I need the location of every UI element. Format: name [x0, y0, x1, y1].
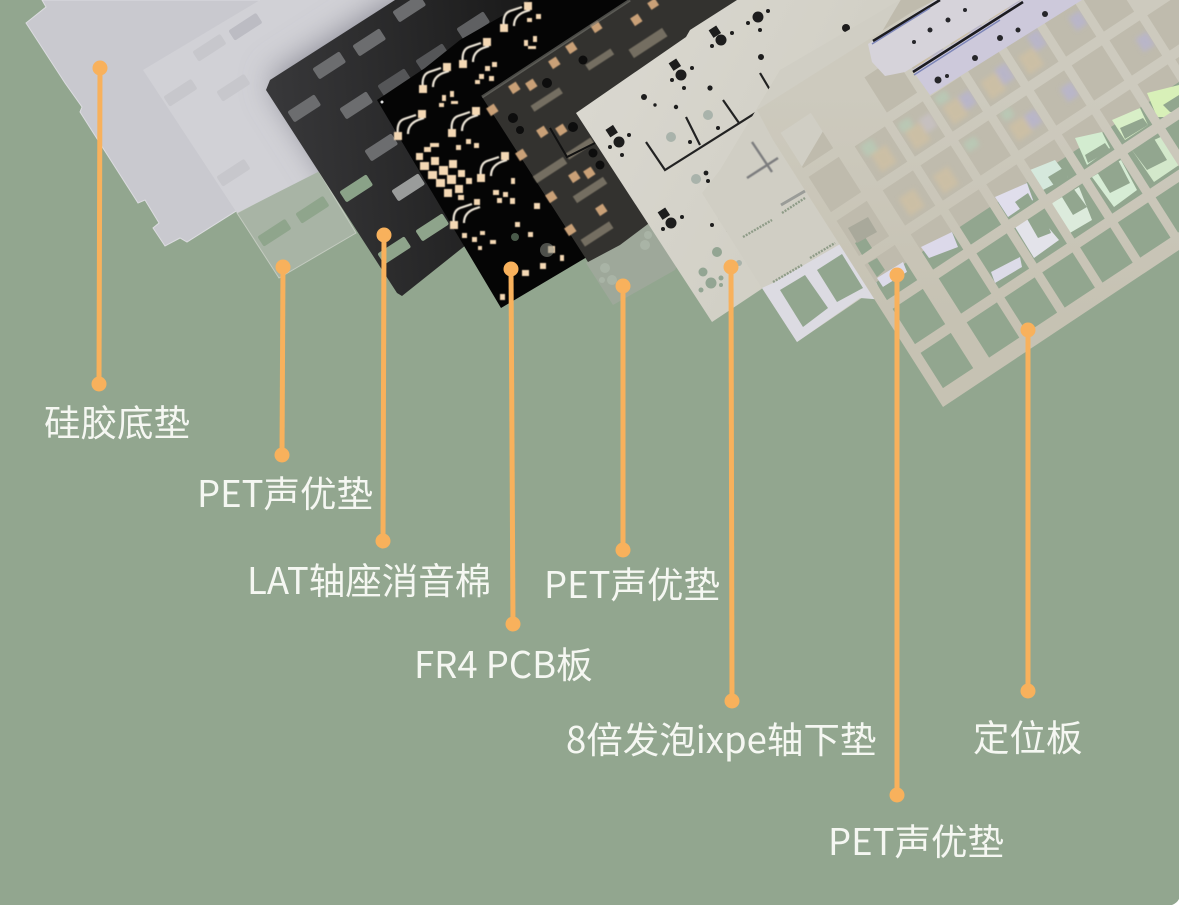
plate ghost bands of the PET sheet [921, 85, 1179, 283]
pointer lines [92, 60, 1036, 802]
label: PET sheet 2: PET声优垫 [544, 556, 720, 609]
layer: IXPE switch pad [576, 0, 1000, 322]
PCB switch footprint 3 [500, 2, 541, 49]
label: PET sheet 1: PET声优垫 [197, 465, 373, 518]
layer: PET sheet 1 [237, 170, 356, 278]
leader: PET sheet 3 [890, 268, 904, 802]
PCB switch footprint 7 [450, 199, 485, 242]
leader: PET sheet 2 [616, 278, 630, 558]
layer: LAT foam [266, 0, 560, 296]
leader: FR4 PCB [504, 262, 520, 632]
leader: IXPE pad [724, 260, 740, 708]
layer: translucent silicone sheet [229, 0, 395, 213]
layer: PET sheet 2 [586, 223, 690, 305]
corner notch [1172, 899, 1179, 905]
label: silicone bottom pad: 硅胶底垫 [44, 394, 190, 447]
layer: translucent PCB copy [482, 0, 760, 262]
leader: LAT foam [376, 228, 392, 548]
PCB dense component block [416, 143, 472, 200]
plate window ghost base [733, 0, 1179, 284]
label: PET sheet 3: PET声优垫 [828, 813, 1004, 866]
leader: PET sheet 1 [274, 260, 290, 462]
layer: silicone bottom pad [26, 0, 420, 246]
PCB switch footprint 1 [419, 63, 458, 107]
layer: FR4 PCB [377, 0, 700, 308]
label: IXPE pad: 8倍发泡ixpe轴下垫 [566, 711, 876, 764]
PCB switch footprint 6 [477, 152, 515, 203]
PCB switch footprint 2 [459, 38, 497, 84]
leader: silicone bottom pad [92, 60, 108, 392]
PCB switch footprint 4 [394, 110, 426, 140]
layer: PET sheet 3 with composite ghosting [702, 0, 1179, 342]
plate ghost: left column window details [848, 217, 913, 297]
leader: plate [1020, 322, 1036, 698]
label: LAT foam: LAT轴座消音棉 [247, 552, 491, 605]
plate ghost colours seen through the windows [809, 0, 1159, 219]
plate ghost: lilac top bands with black slits [868, 0, 1082, 95]
label: plate: 定位板 [973, 709, 1082, 762]
PCB switch footprint 5 [448, 107, 480, 150]
label: FR4 PCB: FR4 PCB板 [414, 636, 593, 689]
layer: switch positioning plate [757, 0, 1179, 407]
